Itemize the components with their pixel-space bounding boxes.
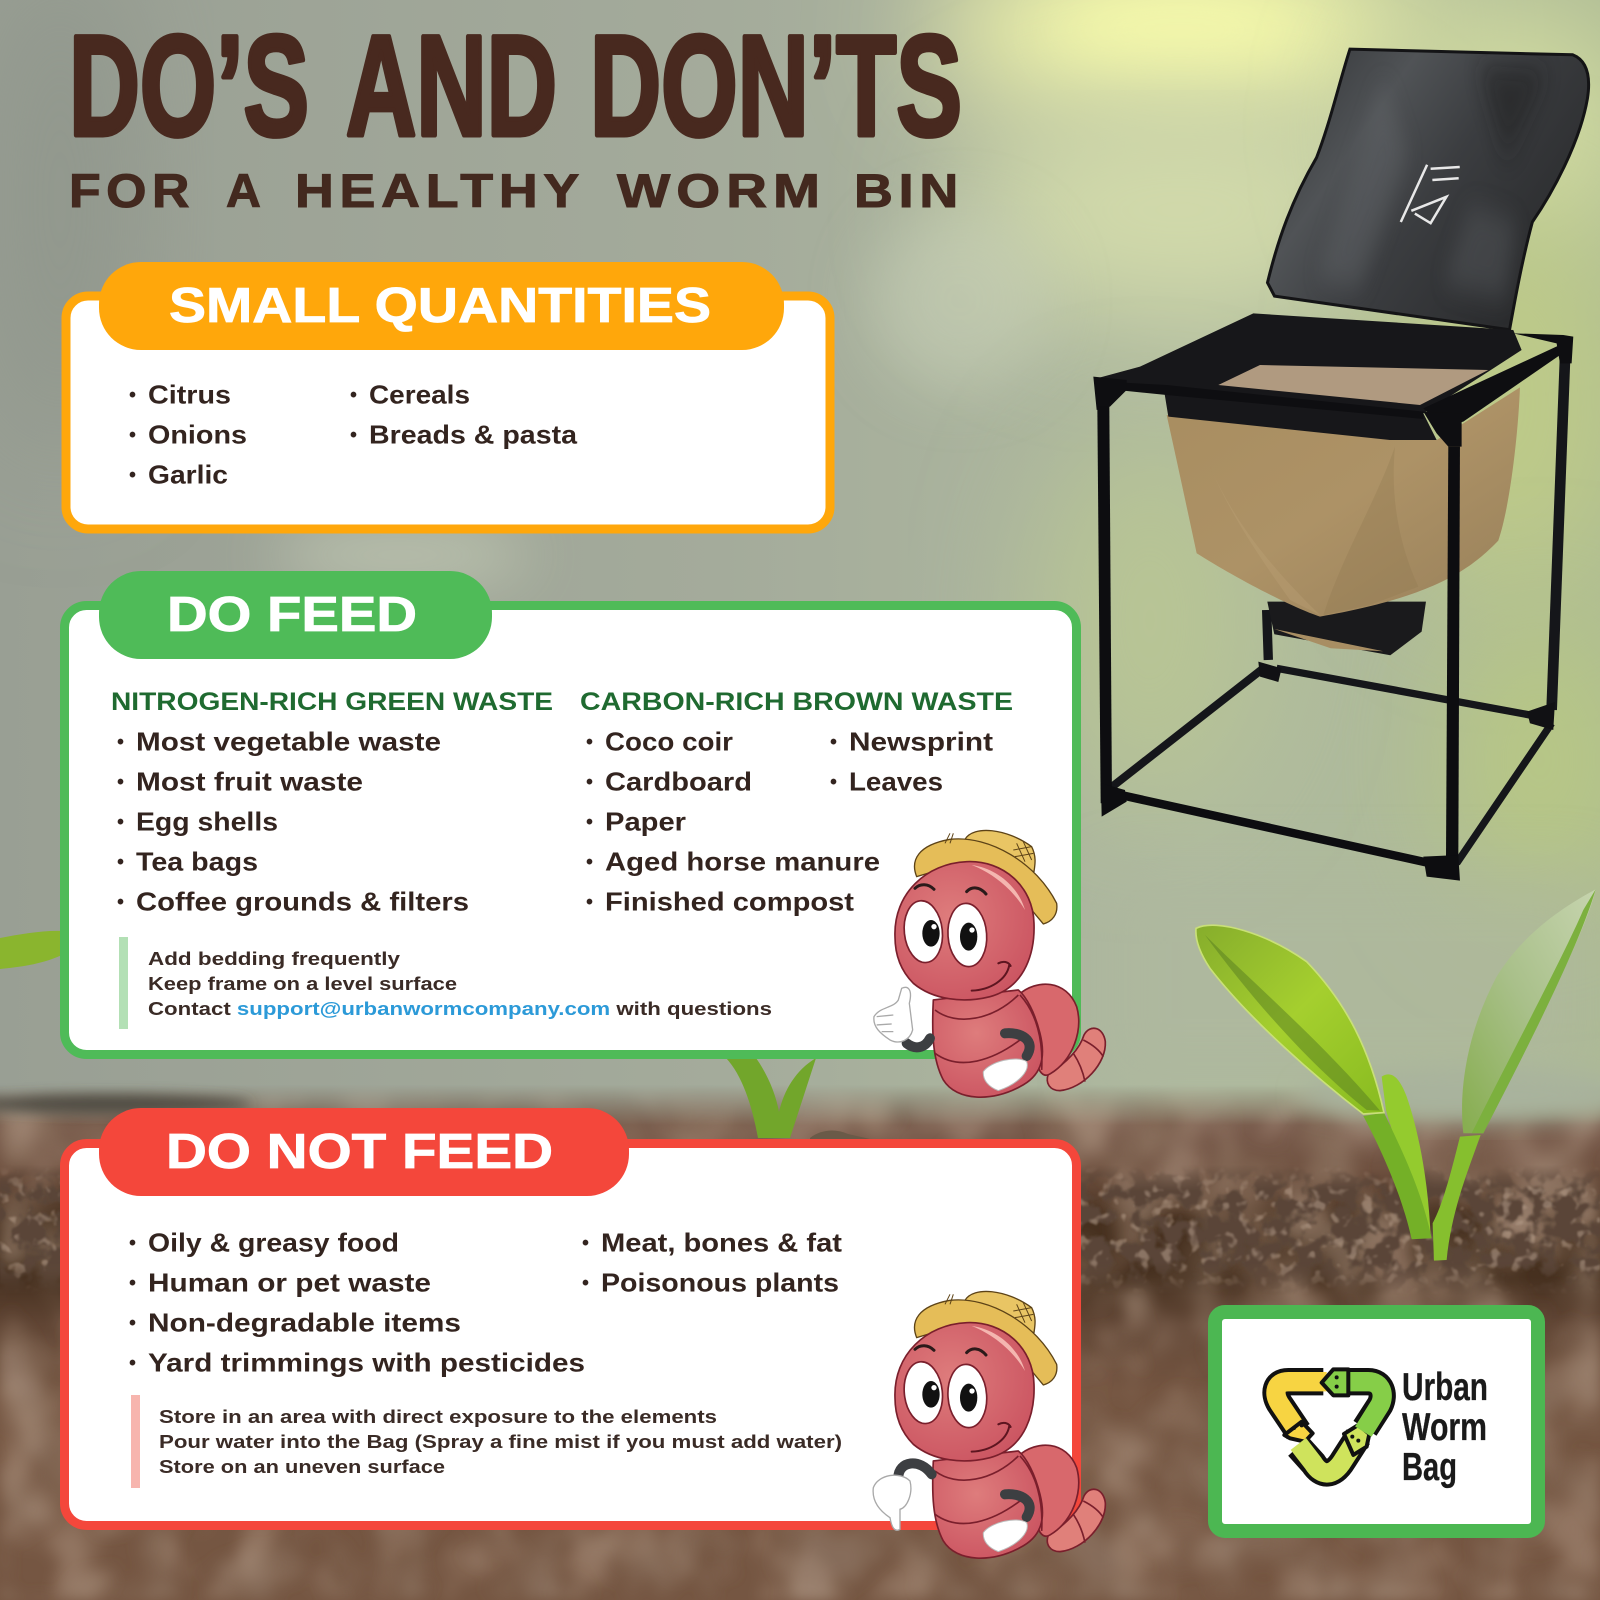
soil ground [0, 1060, 1600, 1600]
list column two: • [350, 384, 357, 406]
left leaf [1196, 925, 1384, 1114]
green waste list: Coffee grounds & filters [136, 886, 469, 916]
list column one [129, 1228, 585, 1378]
title [69, 7, 962, 166]
care notes: Add bedding frequently [148, 948, 401, 969]
brown waste list: Newsprint [849, 726, 993, 756]
list column one: Citrus [148, 380, 231, 410]
product: worm bin [1093, 49, 1589, 881]
brown waste list: • [586, 892, 593, 914]
tail and body [933, 1445, 1105, 1558]
arms [907, 1033, 1030, 1056]
list column one: Oily & greasy food [148, 1228, 399, 1258]
logo mark: three worms [1276, 1369, 1382, 1473]
title: DO’S [69, 7, 309, 166]
list column one: • [129, 424, 136, 446]
eyes [901, 1346, 989, 1429]
lower bag pouch [1267, 602, 1426, 655]
panel frame [64, 1144, 1076, 1526]
list column one: Garlic [148, 460, 228, 490]
heading pill [99, 571, 492, 659]
black rim [1097, 313, 1522, 440]
head highlight [972, 1326, 1025, 1371]
subtitle: HEALTHY [295, 164, 585, 217]
heading: DO NOT FEED [166, 1125, 553, 1179]
subtitle: WORM [617, 164, 826, 217]
list column one: • [129, 464, 136, 486]
bottom joints [1258, 662, 1555, 730]
hand: thumb up [874, 987, 913, 1042]
front frame tubes [1093, 333, 1573, 447]
smile [972, 962, 1011, 991]
title: AND [346, 7, 557, 166]
hand: front [983, 1059, 1027, 1091]
care notes: Keep frame on a level surface [148, 973, 457, 994]
heading: SMALL QUANTITIES [169, 279, 711, 333]
panel frame [64, 606, 1076, 1054]
list column one: • [129, 1272, 136, 1294]
head highlight [972, 865, 1025, 910]
logo wordmark: Worm [1402, 1406, 1487, 1449]
list column one: • [129, 1232, 136, 1254]
brown waste list [586, 726, 993, 916]
brown waste list: Paper [605, 806, 686, 836]
light green worm [1298, 1425, 1369, 1473]
back frame bars [1108, 360, 1565, 863]
list column two: • [350, 424, 357, 446]
heading pill [99, 262, 784, 350]
list column two: Poisonous plants [601, 1268, 839, 1298]
brown waste list: Finished compost [605, 886, 854, 916]
panel: small quantities [66, 262, 830, 529]
list column two [350, 380, 578, 450]
horizon haze behind the plant [1300, 1067, 1600, 1123]
note bar [119, 937, 128, 1029]
subheading: nitrogen-rich green waste: NITROGEN-RICH GREEN WASTE [111, 688, 553, 716]
legs and front base bars [1097, 407, 1460, 881]
logo wordmark [1402, 1366, 1488, 1489]
dark soil ridge at the left edge [0, 1095, 250, 1113]
care notes [159, 1406, 842, 1477]
bin lid [1267, 49, 1589, 330]
hand: thumb down [873, 1475, 911, 1530]
straw hat [915, 1291, 1057, 1385]
green waste list: Egg shells [136, 806, 278, 836]
list column one: Onions [148, 420, 247, 450]
subtitle: A [226, 164, 266, 217]
list column two: Cereals [369, 380, 470, 410]
green waste list: • [117, 812, 124, 834]
seedling behind the panels [726, 1058, 870, 1139]
small seedling leaf at the left edge [0, 931, 62, 969]
brown waste list: Leaves [849, 766, 943, 796]
care notes: Store in an area with direct exposure to the elements [159, 1406, 717, 1427]
tan bag body [1167, 387, 1520, 617]
brown waste list: • [586, 812, 593, 834]
mascot: worm thumbs up [874, 830, 1105, 1097]
brown waste list: Aged horse manure [605, 846, 880, 876]
green worm [1322, 1369, 1382, 1432]
bag opening [1218, 365, 1488, 405]
care notes [148, 948, 772, 1019]
panel frame [66, 296, 830, 529]
list column one: Non-degradable items [148, 1308, 461, 1338]
care notes: Contact support@urbanwormcompany.com with questions [148, 998, 772, 1019]
green waste list: Most fruit waste [136, 766, 363, 796]
yellow worm [1276, 1382, 1327, 1442]
list column two: Breads & pasta [369, 420, 578, 450]
list column two: • [582, 1232, 589, 1254]
green waste list: • [117, 892, 124, 914]
straw hat [915, 830, 1057, 924]
list column one: Yard trimmings with pesticides [148, 1348, 585, 1378]
list column one [129, 380, 247, 490]
mascot: worm thumbs down [873, 1291, 1105, 1558]
brown waste list: • [586, 852, 593, 874]
head [895, 862, 1034, 1000]
arms [898, 1463, 1030, 1517]
right leaf [1462, 889, 1596, 1133]
eyes [901, 885, 989, 968]
brand panel: Urban Worm Bag logo [1215, 1312, 1538, 1531]
panel: do not feed [64, 1108, 1076, 1526]
title: DON’TS [590, 7, 962, 166]
plant stems [1363, 1074, 1481, 1261]
list column two: • [582, 1272, 589, 1294]
brown waste list: Coco coir [605, 726, 733, 756]
list column one: • [129, 1312, 136, 1334]
brown waste list: • [586, 732, 593, 754]
green waste list: Most vegetable waste [136, 726, 441, 756]
list column one: • [129, 384, 136, 406]
panel: do feed [64, 571, 1076, 1054]
logo wordmark: Bag [1402, 1446, 1457, 1489]
green waste list: • [117, 772, 124, 794]
hand: front [983, 1520, 1027, 1552]
tail and body [933, 984, 1105, 1097]
subtitle: BIN [854, 164, 964, 217]
brown waste list: • [830, 772, 837, 794]
list column one: • [129, 1352, 136, 1374]
list column one: Human or pet waste [148, 1268, 431, 1298]
logo wordmark: Urban [1402, 1366, 1488, 1409]
green waste list: • [117, 732, 124, 754]
green waste list [117, 726, 469, 916]
list column two: Meat, bones & fat [601, 1228, 842, 1258]
heading: DO FEED [167, 588, 417, 642]
care notes: Store on an uneven surface [159, 1456, 445, 1477]
subtitle [69, 164, 964, 217]
list column two [582, 1228, 842, 1298]
subheading: carbon-rich brown waste: CARBON-RICH BROWN WASTE [580, 688, 1013, 716]
head [895, 1323, 1034, 1461]
subtitle: FOR [69, 164, 195, 217]
care notes: Pour water into the Bag (Spray a fine mist if you must add water) [159, 1431, 842, 1452]
heading pill [99, 1108, 629, 1196]
brown waste list: • [586, 772, 593, 794]
sprouting plant at right [1196, 889, 1596, 1261]
logo frame [1215, 1312, 1538, 1531]
green waste list: • [117, 852, 124, 874]
brown waste list: • [830, 732, 837, 754]
brown waste list: Cardboard [605, 766, 752, 796]
green waste list: Tea bags [136, 846, 258, 876]
note bar [131, 1395, 140, 1488]
smile [972, 1423, 1011, 1452]
